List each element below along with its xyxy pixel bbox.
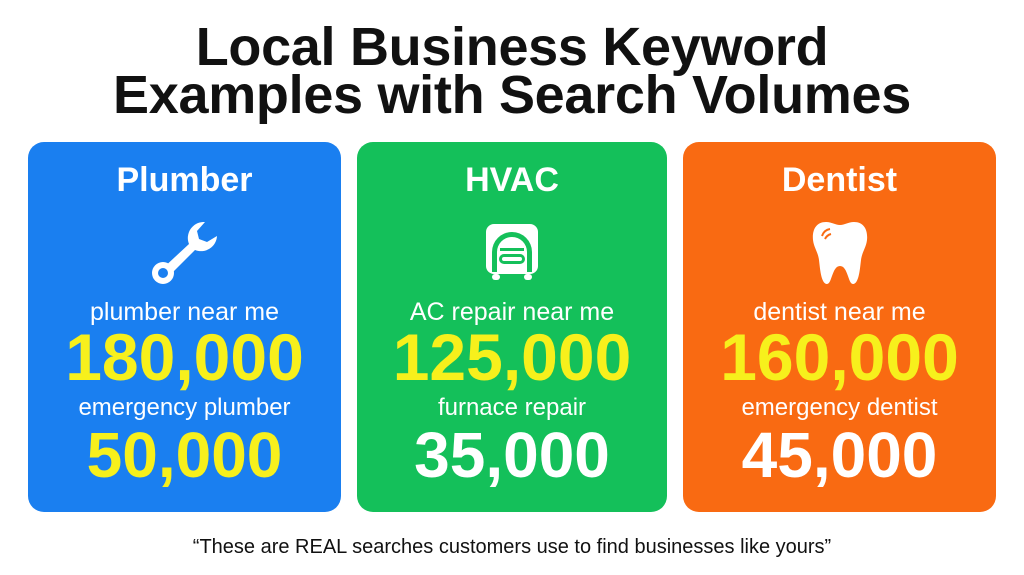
title	[113, 17, 911, 125]
heading: hvac: HVAC	[465, 161, 559, 199]
icon: wrench	[152, 222, 217, 284]
number 1: 125,000	[393, 320, 631, 394]
panel: dentist	[683, 142, 996, 512]
title: Examples with Search Volumes	[113, 65, 911, 125]
icon: tooth	[812, 222, 868, 284]
icon: ac unit	[486, 224, 538, 280]
number 1: 180,000	[65, 320, 304, 394]
title: Local Business Keyword	[196, 17, 828, 77]
number 2: 50,000	[87, 419, 282, 491]
keyword 2: emergency plumber	[78, 394, 291, 421]
number 1: 160,000	[720, 320, 959, 394]
footer quote: “These are REAL searches customers use to find businesses like yours”	[193, 536, 831, 558]
keyword 1: dentist near me	[753, 298, 926, 326]
panel: plumber	[28, 142, 341, 512]
panel: hvac	[357, 142, 667, 512]
number 2: 35,000	[414, 419, 610, 491]
keyword 2: furnace repair	[438, 394, 586, 421]
number 2: 45,000	[742, 419, 937, 491]
keyword 1: AC repair near me	[410, 298, 614, 326]
keyword 1: plumber near me	[90, 298, 279, 326]
heading: plumber: Plumber	[116, 161, 253, 199]
heading: dentist: Dentist	[782, 161, 897, 199]
keyword 2: emergency dentist	[741, 394, 938, 421]
